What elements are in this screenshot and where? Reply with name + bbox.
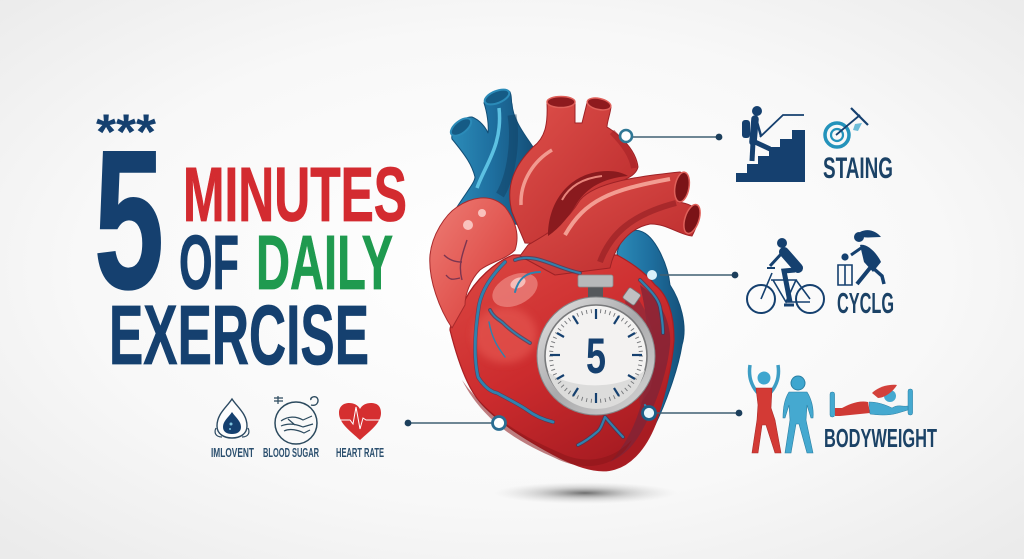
- vein shadows: [475, 258, 663, 445]
- coronary veins: [475, 258, 663, 445]
- stopwatch: [537, 275, 655, 415]
- icon: blue figure standing: [783, 376, 813, 453]
- illustration: anatomical heart: [430, 87, 703, 471]
- label: cyclg: CYCLG: [837, 288, 894, 320]
- connector: bottom right: [642, 406, 742, 420]
- stopwatch case: [537, 297, 655, 415]
- label: staing: STAING: [823, 152, 893, 185]
- right atrium lobe: [430, 198, 517, 328]
- label: heart rate: HEART RATE: [336, 445, 384, 460]
- word: minutes: MINUTES: [183, 152, 407, 238]
- stopwatch number 5: 5: [586, 328, 606, 384]
- pulmonary trunk: [520, 171, 703, 275]
- label: blood sugar: BLOOD SUGAR: [263, 445, 319, 460]
- ventricle shading: [462, 266, 670, 466]
- blue left ventricle side: [617, 230, 684, 425]
- minor ticks: [551, 311, 641, 401]
- icon: water drop: [215, 399, 249, 438]
- dark arch between aorta and trunk: [548, 171, 628, 236]
- stopwatch face crescent: [548, 370, 645, 409]
- ventricle: [450, 255, 674, 471]
- connector: middle right: [647, 270, 738, 280]
- connector: top right: [620, 130, 722, 142]
- icon: stair target: [825, 108, 868, 147]
- word: exercise: EXERCISE: [109, 288, 369, 382]
- aorta: [510, 96, 638, 245]
- stopwatch side button: [622, 287, 641, 306]
- decorative stars above title: ***: [96, 104, 157, 160]
- title: 5 minutes of daily exercise: [94, 104, 407, 382]
- connector: bottom left: [405, 416, 506, 430]
- blue vessels: [448, 87, 533, 225]
- vein highlights: [475, 258, 663, 445]
- word: of: OF: [179, 220, 239, 306]
- stopwatch crown: [588, 286, 603, 298]
- icon: red figure arms raised: [749, 365, 781, 453]
- label: bodyweight: BODYWEIGHT: [824, 423, 937, 453]
- icon: blood sugar hands: [274, 396, 318, 444]
- word: daily: DAILY: [256, 220, 393, 306]
- icon: cyclist: [747, 238, 824, 313]
- large numeral 5: 5: [94, 109, 164, 330]
- icon: person climbing stairs: [736, 106, 805, 182]
- major ticks: [550, 309, 642, 403]
- label: imlovent: IMLOVENT: [211, 445, 254, 460]
- icon: plank exercise: [830, 385, 913, 417]
- icon: heart rate: [339, 403, 381, 440]
- heart ground shadow: [493, 482, 677, 504]
- icon: runner with bin: [838, 230, 884, 285]
